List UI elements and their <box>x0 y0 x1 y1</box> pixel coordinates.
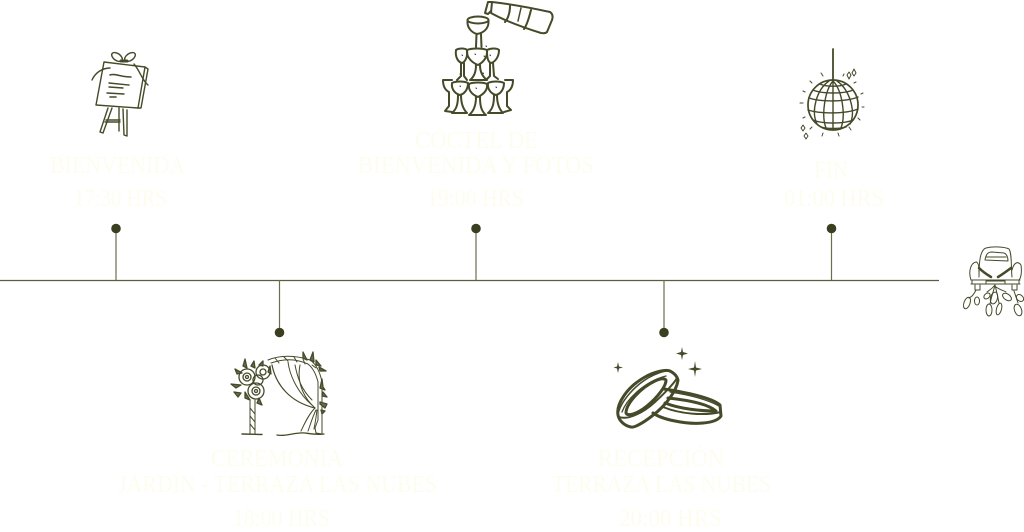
text: coctel de bienvenida y fotos: CÓCTEL DE <box>415 127 538 154</box>
text: recepcion: TERRAZA LAS NUBES <box>552 472 771 498</box>
flowers <box>231 352 327 414</box>
text: coctel de bienvenida y fotos: BIENVENIDA Y FOTOS <box>358 153 594 179</box>
icon: flower arch <box>231 352 327 435</box>
text: coctel de bienvenida y fotos: 19:00 HRS <box>427 186 524 212</box>
icon: sparkles <box>614 347 702 377</box>
text: bienvenida <box>50 153 186 212</box>
icon: champagne tower <box>443 2 553 115</box>
text: bienvenida: BIENVENIDA <box>50 153 186 179</box>
text: fin <box>784 158 884 212</box>
icon: just married car <box>962 247 1024 317</box>
icon: wedding rings <box>618 370 721 427</box>
marker: recepcion <box>659 280 669 337</box>
text: recepcion: 20:00 HRS <box>619 506 722 532</box>
icon: disco ball <box>800 49 864 139</box>
middle glasses <box>456 48 499 80</box>
icon: welcome sign on easel <box>92 51 148 136</box>
bottle <box>485 2 553 33</box>
text: coctel de bienvenida y fotos <box>358 127 594 212</box>
text: bienvenida: 17:30 HRS <box>74 186 167 212</box>
text: fin: FIN <box>814 158 848 184</box>
text: ceremonia <box>118 446 437 532</box>
text: ceremonia: JARDÍN - TERRAZA LAS NUBES <box>118 472 437 498</box>
text: recepcion: RECEPCIÓN <box>598 445 724 472</box>
marker: coctel <box>471 224 481 280</box>
bubbles <box>460 46 496 88</box>
text: ceremonia: 18:00 HRS <box>233 506 330 532</box>
marker: fin <box>827 224 836 280</box>
bottom glasses <box>443 80 513 115</box>
text: fin: 01:00 HRS <box>784 186 884 212</box>
timeline axis <box>0 280 939 282</box>
marker: bienvenida <box>111 224 121 280</box>
top glass <box>467 16 489 47</box>
text: ceremonia: CEREMONIA <box>211 446 344 472</box>
text: recepcion <box>552 445 771 532</box>
marker: ceremonia <box>275 280 284 337</box>
